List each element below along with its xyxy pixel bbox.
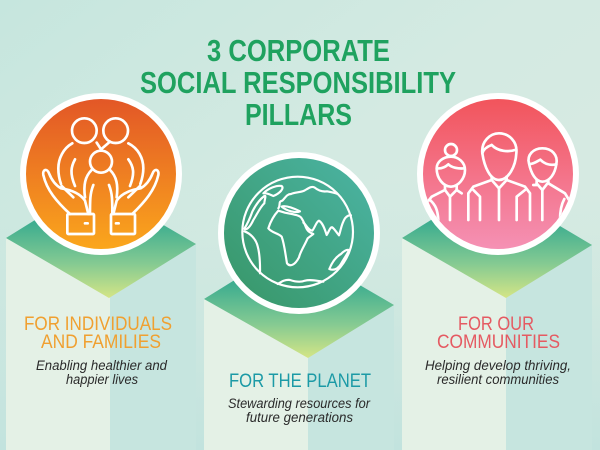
text block: individuals and families: happier lives (66, 372, 138, 387)
text block: communities: Helping develop thriving, (425, 358, 571, 373)
text block: individuals and families: AND FAMILIES (41, 331, 161, 353)
woman (428, 144, 465, 220)
title: 3 CORPORATE (207, 33, 390, 68)
text block: communities (425, 313, 571, 387)
panel: communities pillar (402, 184, 592, 450)
text block: planet: Stewarding resources for (228, 396, 370, 411)
text block: communities: FOR OUR (458, 313, 534, 335)
title: SOCIAL RESPONSIBILITY (140, 65, 456, 100)
text block: communities: COMMUNITIES (437, 331, 560, 353)
diamond top (6, 184, 196, 298)
text block: individuals and families: Enabling healthier and (36, 358, 167, 373)
panel: individuals and families pillar (6, 184, 196, 450)
text block: planet (228, 370, 371, 425)
diamond top (402, 184, 592, 298)
icon: family in caring hands (23, 96, 179, 252)
text block: individuals and families: FOR INDIVIDUALS (24, 313, 172, 335)
icon: community people (420, 96, 576, 252)
text block: planet: FOR THE PLANET (229, 370, 371, 392)
diamond top (204, 245, 394, 358)
text block: planet: future generations (246, 410, 353, 425)
title: PILLARS (245, 97, 352, 132)
icon: globe (221, 155, 377, 311)
man centre (468, 133, 530, 220)
man right (529, 148, 569, 220)
title (140, 33, 456, 132)
panel: planet pillar (204, 245, 394, 450)
text block: individuals and families (24, 313, 172, 387)
text block: communities: resilient communities (437, 372, 559, 387)
